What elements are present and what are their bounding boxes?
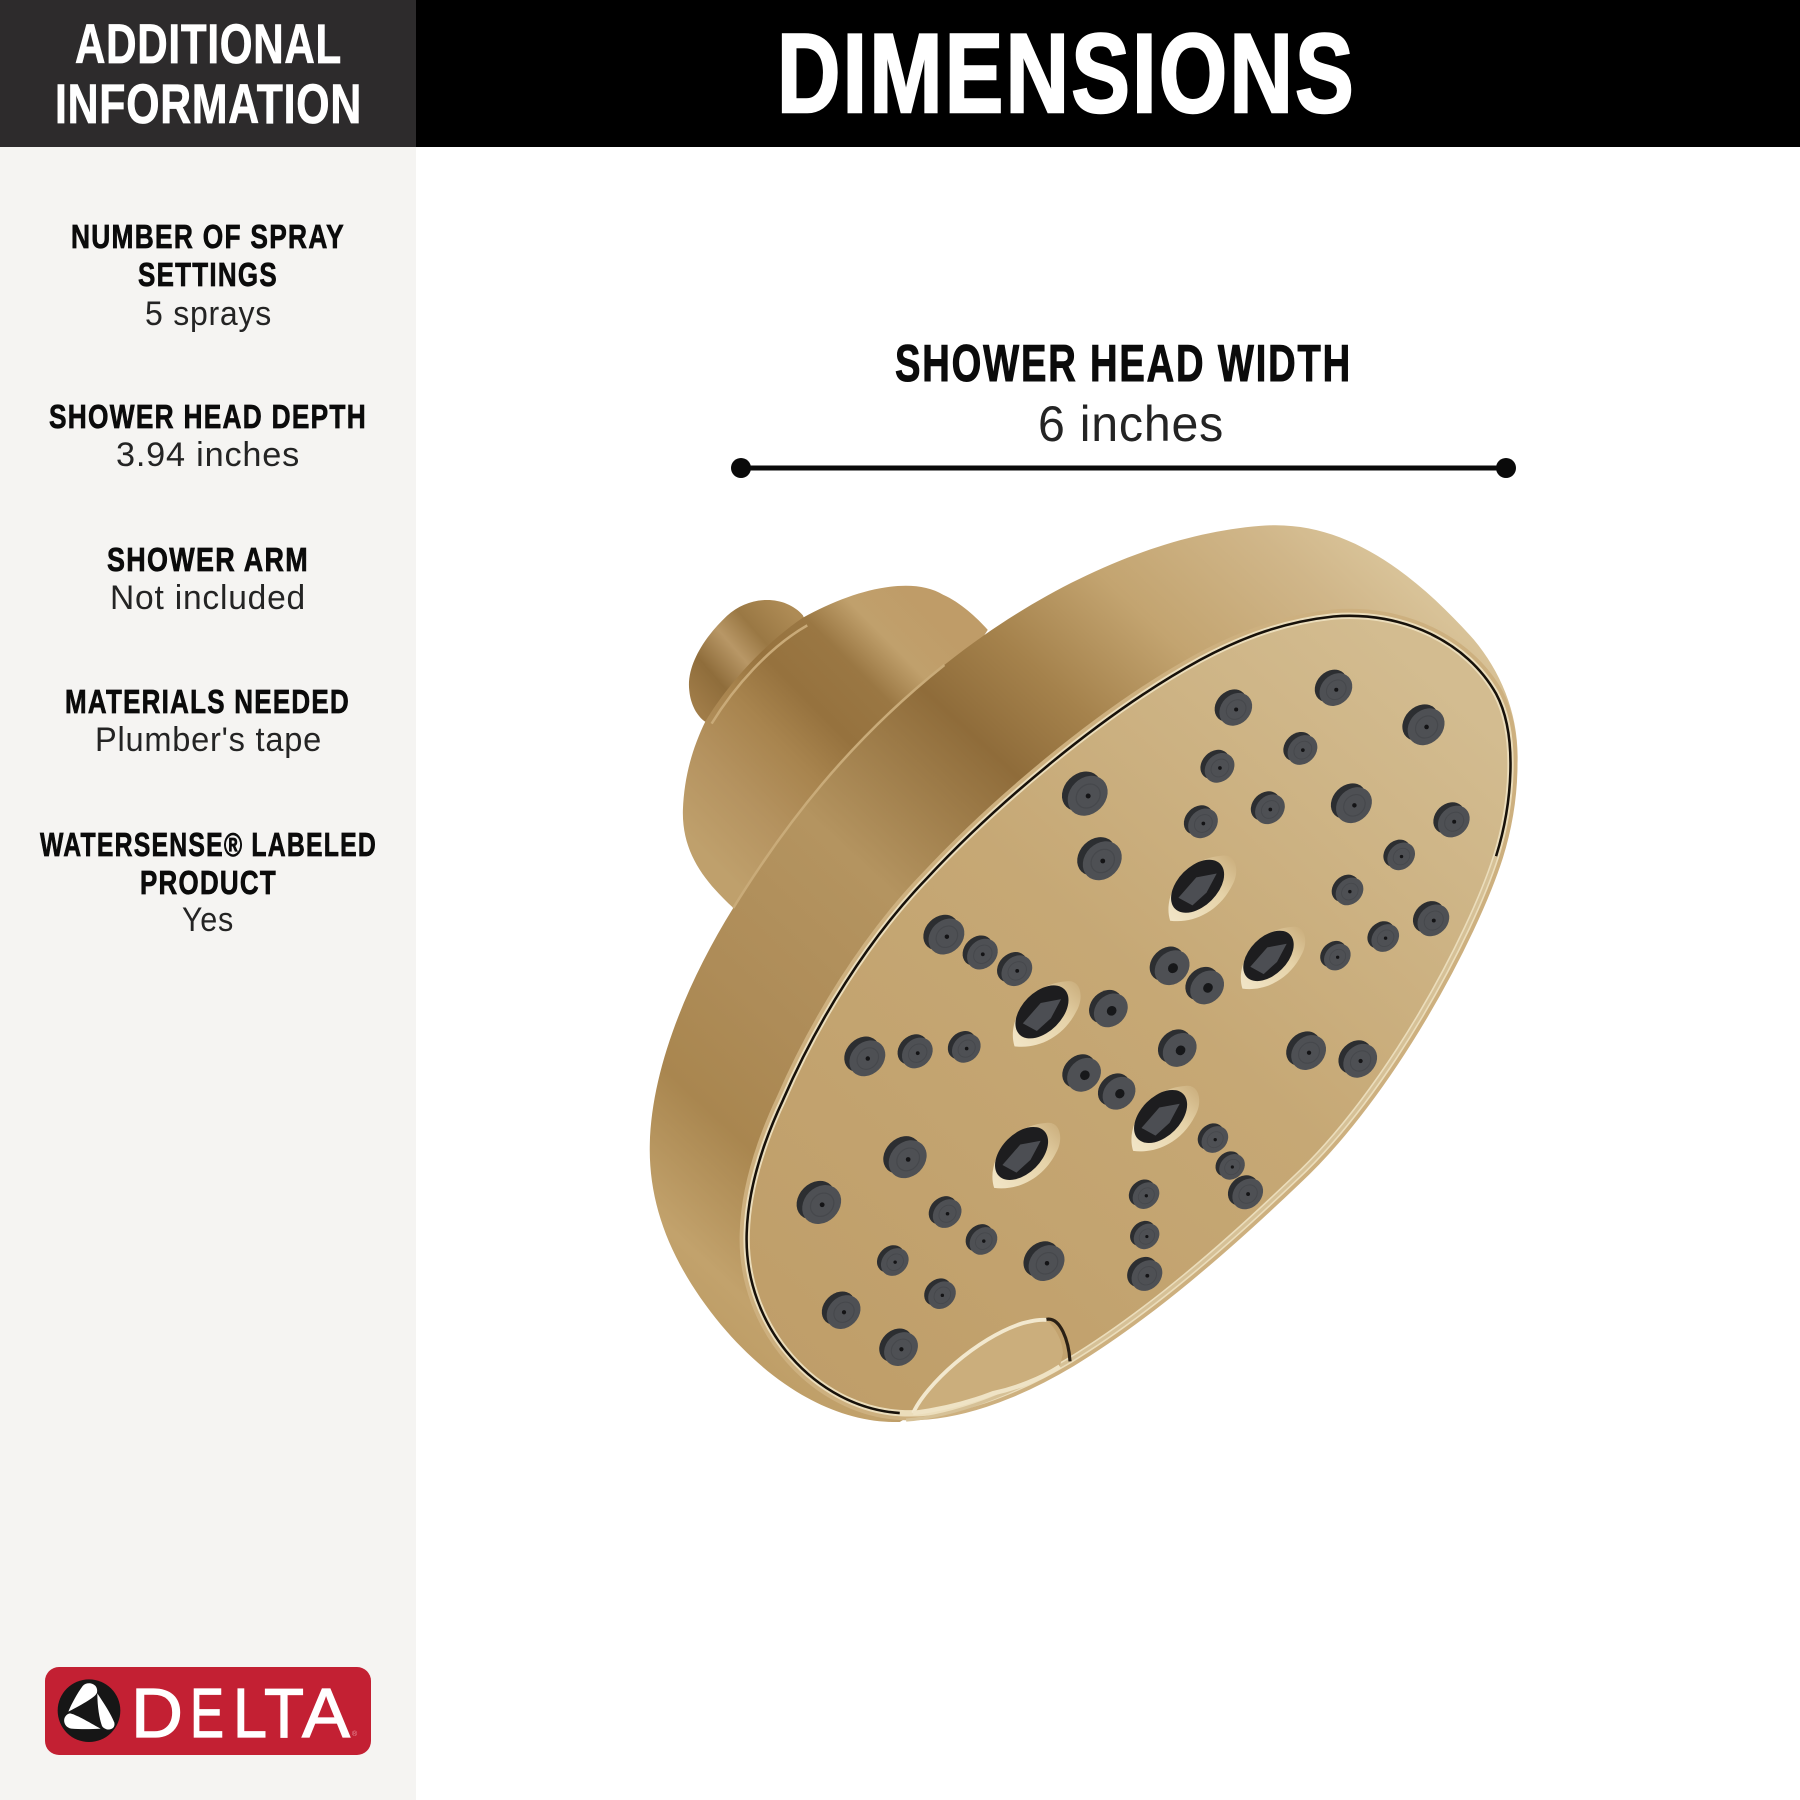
rubber nozzles bbox=[789, 663, 1476, 1373]
panel: additional information header bbox=[0, 0, 416, 147]
spec: shower head depth bbox=[49, 398, 367, 474]
spec: number of spray settings: NUMBER OF SPRAY bbox=[71, 218, 345, 255]
logo: delta bbox=[45, 1667, 371, 1755]
collar bbox=[683, 586, 988, 908]
logo: delta: A bbox=[302, 1674, 350, 1752]
spec: shower head depth: SHOWER HEAD DEPTH bbox=[49, 398, 367, 435]
large spray openings bbox=[985, 850, 1305, 1190]
face rim bbox=[747, 616, 1511, 1413]
face plate bbox=[747, 616, 1511, 1413]
face seam line bbox=[747, 616, 1511, 1413]
spec: materials needed: MATERIALS NEEDED bbox=[65, 683, 350, 720]
spec: shower arm: Not included bbox=[110, 579, 306, 617]
logo: delta: ® bbox=[352, 1730, 358, 1738]
head body bbox=[650, 525, 1518, 1422]
panel: additional information sidebar bbox=[0, 147, 416, 1800]
width dimension line bbox=[731, 458, 1516, 478]
connector stem bbox=[689, 600, 817, 722]
logo: delta: L bbox=[233, 1674, 267, 1752]
shower head illustration bbox=[650, 525, 1518, 1422]
icon: delta triangle emblem bbox=[58, 1679, 120, 1742]
title bar: dimensions: DIMENSIONS bbox=[777, 11, 1356, 136]
body rear edge highlight bbox=[733, 665, 944, 908]
spec: watersense labeled product: WATERSENSE® LABELED bbox=[40, 826, 377, 863]
panel: additional information header: INFORMATION bbox=[55, 72, 362, 135]
heading: shower head width bbox=[895, 335, 1352, 452]
spray selector tab bbox=[913, 1319, 1070, 1413]
panel: additional information header: ADDITIONAL bbox=[75, 12, 342, 75]
logo: delta: T bbox=[264, 1674, 304, 1752]
heading: shower head width: SHOWER HEAD WIDTH bbox=[895, 335, 1352, 393]
logo: delta: E bbox=[190, 1674, 224, 1752]
title bar: dimensions bbox=[416, 0, 1800, 147]
spec: watersense labeled product: Yes bbox=[182, 901, 234, 939]
lower right face edge bbox=[906, 856, 1496, 1420]
spec: shower arm bbox=[107, 541, 309, 617]
spec: shower arm: SHOWER ARM bbox=[107, 541, 309, 578]
logo: delta: D bbox=[131, 1674, 183, 1752]
spec: watersense labeled product: PRODUCT bbox=[140, 864, 277, 901]
spec: materials needed: Plumber's tape bbox=[95, 721, 322, 759]
collar chamfer highlight bbox=[712, 625, 807, 724]
spec: number of spray settings: SETTINGS bbox=[138, 256, 278, 293]
spec: materials needed bbox=[65, 683, 350, 759]
spec: number of spray settings: 5 sprays bbox=[145, 295, 272, 333]
spec: watersense labeled product bbox=[40, 826, 377, 939]
spec: number of spray settings bbox=[71, 218, 345, 333]
heading: shower head width: 6 inches bbox=[1038, 396, 1224, 452]
spec: shower head depth: 3.94 inches bbox=[116, 436, 300, 474]
